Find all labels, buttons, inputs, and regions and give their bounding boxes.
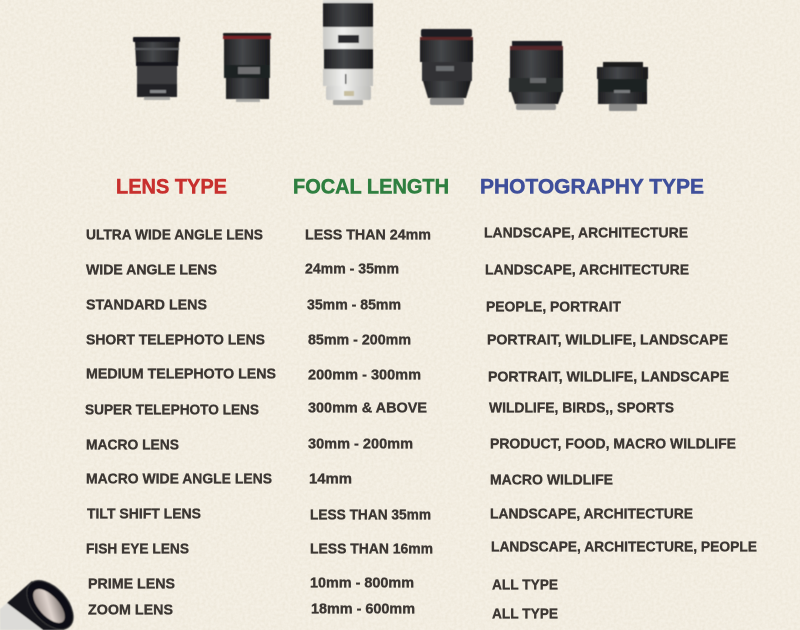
- table row: prime: [88, 575, 558, 593]
- table row: ultra wide angle: ULTRA WIDE ANGLE LENS: [86, 227, 263, 243]
- table row: fish eye: LANDSCAPE, ARCHITECTURE, PEOPLE: [491, 539, 757, 555]
- table row: wide angle: LANDSCAPE, ARCHITECTURE: [485, 262, 689, 278]
- table row: short telephoto: 85mm - 200mm: [308, 332, 411, 348]
- table row: macro: [86, 436, 736, 453]
- table row: prime: 10mm - 800mm: [310, 575, 414, 591]
- table row: medium telephoto: 200mm - 300mm: [308, 367, 421, 383]
- table row: medium telephoto: MEDIUM TELEPHOTO LENS: [86, 366, 276, 382]
- lens photo: RF standard zoom: [420, 29, 473, 105]
- heading: focal length: FOCAL LENGTH: [293, 175, 449, 198]
- lens photo: compact RF prime: [597, 62, 648, 111]
- lens photo: ultra wide zoom: [133, 37, 180, 100]
- table row: ultra wide angle: LESS THAN 24mm: [305, 227, 431, 243]
- heading: photography type: PHOTOGRAPHY TYPE: [480, 175, 704, 198]
- table row: super telephoto: SUPER TELEPHOTO LENS: [85, 402, 259, 418]
- table row: zoom: ZOOM LENS: [88, 602, 173, 618]
- table row: zoom: [88, 601, 558, 622]
- table row: fish eye: LESS THAN 16mm: [310, 541, 433, 557]
- table row: fish eye: FISH EYE LENS: [86, 541, 189, 557]
- table row: macro: 30mm - 200mm: [308, 436, 413, 452]
- heading: lens type: LENS TYPE: [116, 175, 227, 198]
- table row: macro wide angle: MACRO WILDLIFE: [490, 472, 613, 488]
- table row: tilt shift: TILT SHIFT LENS: [87, 506, 201, 522]
- table row: fish eye: [86, 539, 757, 557]
- table row: macro: PRODUCT, FOOD, MACRO WILDLIFE: [490, 436, 736, 452]
- table row: short telephoto: SHORT TELEPHOTO LENS: [86, 332, 265, 348]
- table row: zoom: 18mm - 600mm: [311, 601, 415, 617]
- table row: wide angle: 24mm - 35mm: [305, 261, 399, 277]
- table row: macro wide angle: 14mm: [309, 471, 352, 487]
- table row: standard: STANDARD LENS: [86, 297, 207, 313]
- corner lens photo: [0, 572, 82, 630]
- table row: ultra wide angle: LANDSCAPE, ARCHITECTURE: [484, 225, 688, 241]
- lens photo: white telephoto: [323, 0, 373, 105]
- table row: tilt shift: [87, 506, 693, 523]
- table row: wide angle: WIDE ANGLE LENS: [86, 262, 217, 278]
- table row: ultra wide angle: [86, 225, 688, 243]
- table row: super telephoto: 300mm & ABOVE: [308, 400, 427, 416]
- table row: zoom: ALL TYPE: [492, 606, 558, 622]
- table row: standard: 35mm - 85mm: [307, 297, 401, 313]
- lens photo: wide angle L: [223, 33, 271, 102]
- table row: standard: [86, 297, 621, 315]
- table row: prime: ALL TYPE: [492, 577, 558, 593]
- table row: medium telephoto: PORTRAIT, WILDLIFE, LANDSCAPE: [488, 369, 729, 385]
- table row: tilt shift: LESS THAN 35mm: [310, 507, 431, 523]
- table row: short telephoto: PORTRAIT, WILDLIFE, LANDSCAPE: [487, 332, 728, 348]
- table row: macro wide angle: MACRO WIDE ANGLE LENS: [86, 471, 272, 487]
- table row: super telephoto: WILDLIFE, BIRDS,, SPORTS: [489, 400, 674, 416]
- table row: macro: MACRO LENS: [86, 437, 179, 453]
- table row: medium telephoto: [86, 366, 729, 385]
- table row: standard: PEOPLE, PORTRAIT: [486, 299, 621, 315]
- table row: tilt shift: LANDSCAPE, ARCHITECTURE: [490, 506, 693, 522]
- table row: super telephoto: [85, 400, 674, 418]
- table row: wide angle: [86, 261, 689, 278]
- lens photo: RF portrait prime: [509, 41, 563, 110]
- table row: prime: PRIME LENS: [88, 576, 175, 592]
- table row: macro wide angle: [86, 471, 613, 488]
- table row: short telephoto: [86, 332, 728, 348]
